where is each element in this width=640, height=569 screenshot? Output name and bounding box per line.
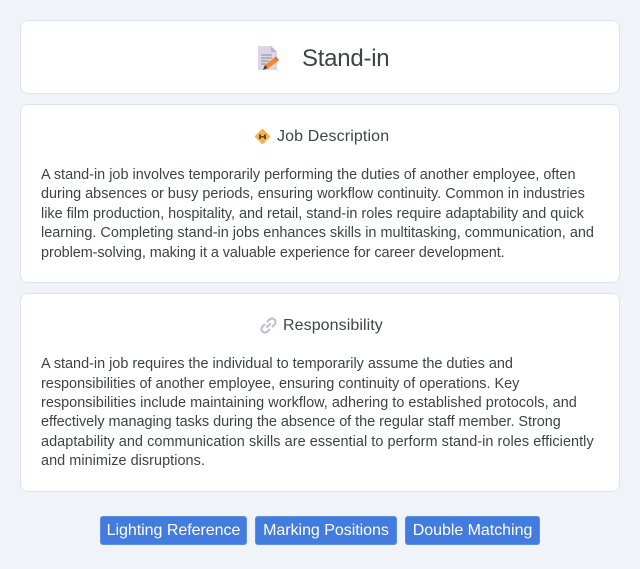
text block: responsibility: responsibilities of another employee, ensuring continuity of operations. Key [41,376,519,392]
text block: job description: problem-solving, making it a valuable experience for career development. [41,245,505,261]
text block: job description: learning. Completing stand-in jobs enhances skills in multitasking, communication, and [41,225,594,241]
panel: title [20,20,620,94]
heading: Responsibility: Responsibility [283,317,383,334]
icon: document with pencil [258,46,279,70]
text block: job description: during absences or busy periods, ensuring workflow continuity. Common in industries [41,186,585,202]
text block: job description: A stand-in job involves temporarily performing the duties of another employee, often [41,167,575,183]
heading: Job Description: Job Description [277,128,389,145]
panel: responsibility [20,293,620,492]
text block: responsibility: and minimize disruptions. [41,453,205,469]
text block: responsibility: effectively managing tasks during the absence of the regular staff member. Strong [41,414,561,430]
button: Marking Positions [255,516,397,545]
button: Double Matching: Double Matching [413,522,532,539]
icon: orange diamond [254,128,270,144]
text block: responsibility: A stand-in job requires the individual to temporarily assume the duties and [41,356,513,372]
text block: responsibility [41,356,594,469]
heading: Stand-in: Stand-in [302,45,389,72]
text block: responsibility: responsibilities include maintaining workflow, adhering to established protocols, and [41,395,577,411]
button: Marking Positions: Marking Positions [263,522,389,539]
panel: job description [20,104,620,283]
icon: chain link [260,317,277,334]
button: Lighting Reference [100,516,247,545]
text block: job description: like film production, hospitality, and retail, stand-in roles require adaptability and quick [41,206,584,222]
text block: job description [41,167,594,261]
button: Double Matching [405,516,540,545]
button: Lighting Reference: Lighting Reference [107,522,240,539]
text block: responsibility: adaptability and communication skills are essential to perform stand-in roles efficiently [41,434,594,450]
